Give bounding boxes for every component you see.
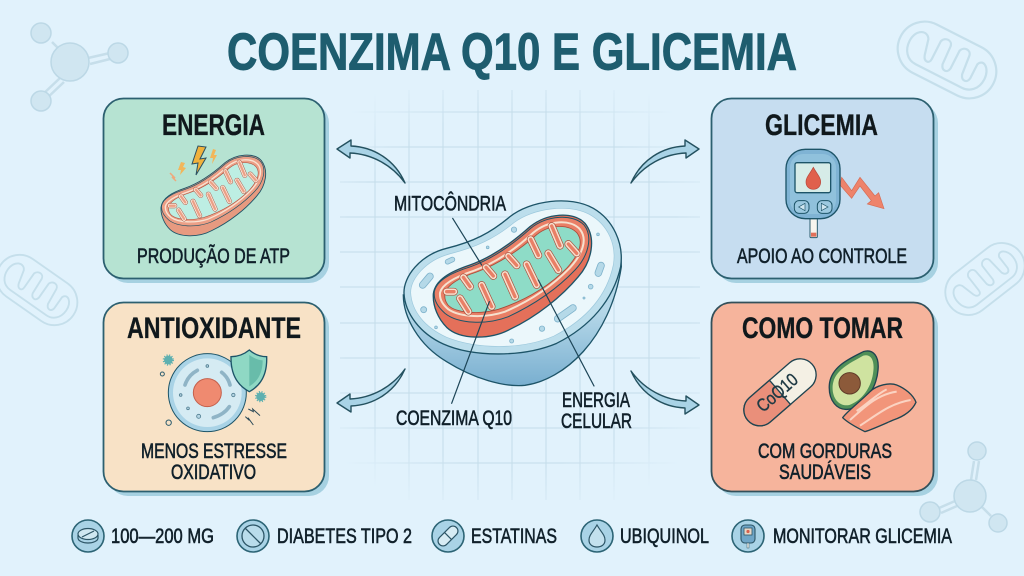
caption: menos estresse oxidativo xyxy=(141,440,287,484)
footer item: monitorar glicemia xyxy=(732,520,952,552)
heading: energia: ENERGIA xyxy=(162,109,265,142)
caption: apoio ao controle: APOIO AO CONTROLE xyxy=(737,245,907,268)
decorative mitochondrion right xyxy=(936,234,1024,324)
arrow: to como tomar xyxy=(631,371,699,414)
panel: como tomar xyxy=(712,302,938,496)
label: mitocondria: MITOCÔNDRIA xyxy=(394,192,506,216)
icon: meter xyxy=(732,520,764,552)
cell top face xyxy=(404,201,621,354)
icon: prohibited xyxy=(237,520,269,552)
organelles xyxy=(418,227,605,343)
footer item: ubiquinol: UBIQUINOL xyxy=(620,525,709,548)
caption: producao de atp: PRODUÇÃO DE ATP xyxy=(137,244,290,268)
footer item: diabetes: DIABETES TIPO 2 xyxy=(277,525,412,548)
label: energia celular: ENERGIA xyxy=(562,389,630,412)
footer item: monitorar glicemia: MONITORAR GLICEMIA xyxy=(773,525,952,548)
cell cytoplasm xyxy=(411,208,614,346)
label: energia celular: CELULAR xyxy=(561,410,632,433)
footer item: dose xyxy=(72,520,214,552)
heading: como tomar: COMO TOMAR xyxy=(742,312,903,345)
title: COENZIMA Q10 E GLICEMIA xyxy=(227,24,797,82)
decorative mitochondrion left xyxy=(0,246,86,334)
footer item: diabetes xyxy=(237,520,412,552)
leader lines xyxy=(452,218,594,403)
icon: pill xyxy=(432,520,464,552)
panel: energia xyxy=(104,98,329,283)
footer item: estatinas xyxy=(432,520,557,552)
decorative molecule bottom right xyxy=(920,442,1007,532)
caption: menos estresse oxidativo: OXIDATIVO xyxy=(171,461,256,484)
footer item: ubiquinol xyxy=(581,520,709,552)
icon: drop xyxy=(581,520,613,552)
arrow: to energia xyxy=(337,140,405,183)
capsule label: CoQ10 xyxy=(753,369,802,416)
heading: antioxidante: ANTIOXIDANTE xyxy=(127,312,301,345)
arrow: to glicemia xyxy=(631,140,699,183)
footer item: estatinas: ESTATINAS xyxy=(471,525,557,548)
panel: antioxidante xyxy=(104,302,329,496)
icon: cell with shield xyxy=(160,350,267,432)
caption: com gorduras saudaveis: SAUDÁVEIS xyxy=(779,461,871,484)
icon: tablet xyxy=(72,520,104,552)
heading: glicemia: GLICEMIA xyxy=(765,109,878,142)
icon: mitochondrion with bolts xyxy=(161,146,266,236)
caption: com gorduras saudaveis xyxy=(758,440,892,484)
decorative molecule top left xyxy=(31,23,128,111)
label: energia celular xyxy=(561,389,632,433)
cell body xyxy=(403,253,621,386)
caption: menos estresse oxidativo: MENOS ESTRESSE xyxy=(141,440,287,463)
mitochondrion xyxy=(433,215,592,337)
icon: glucose meter with falling arrow xyxy=(786,149,884,238)
footer item: dose: 100—200 MG xyxy=(111,525,214,548)
label: coenzima q10: COENZIMA Q10 xyxy=(396,407,512,430)
central mitochondrion diagram xyxy=(394,192,632,433)
decorative mitochondrion top right xyxy=(888,12,1006,108)
icon: capsule, avocado and salmon xyxy=(737,351,916,432)
caption: com gorduras saudaveis: COM GORDURAS xyxy=(758,440,892,463)
arrow: to antioxidante xyxy=(337,369,405,412)
panel: glicemia xyxy=(712,98,938,283)
